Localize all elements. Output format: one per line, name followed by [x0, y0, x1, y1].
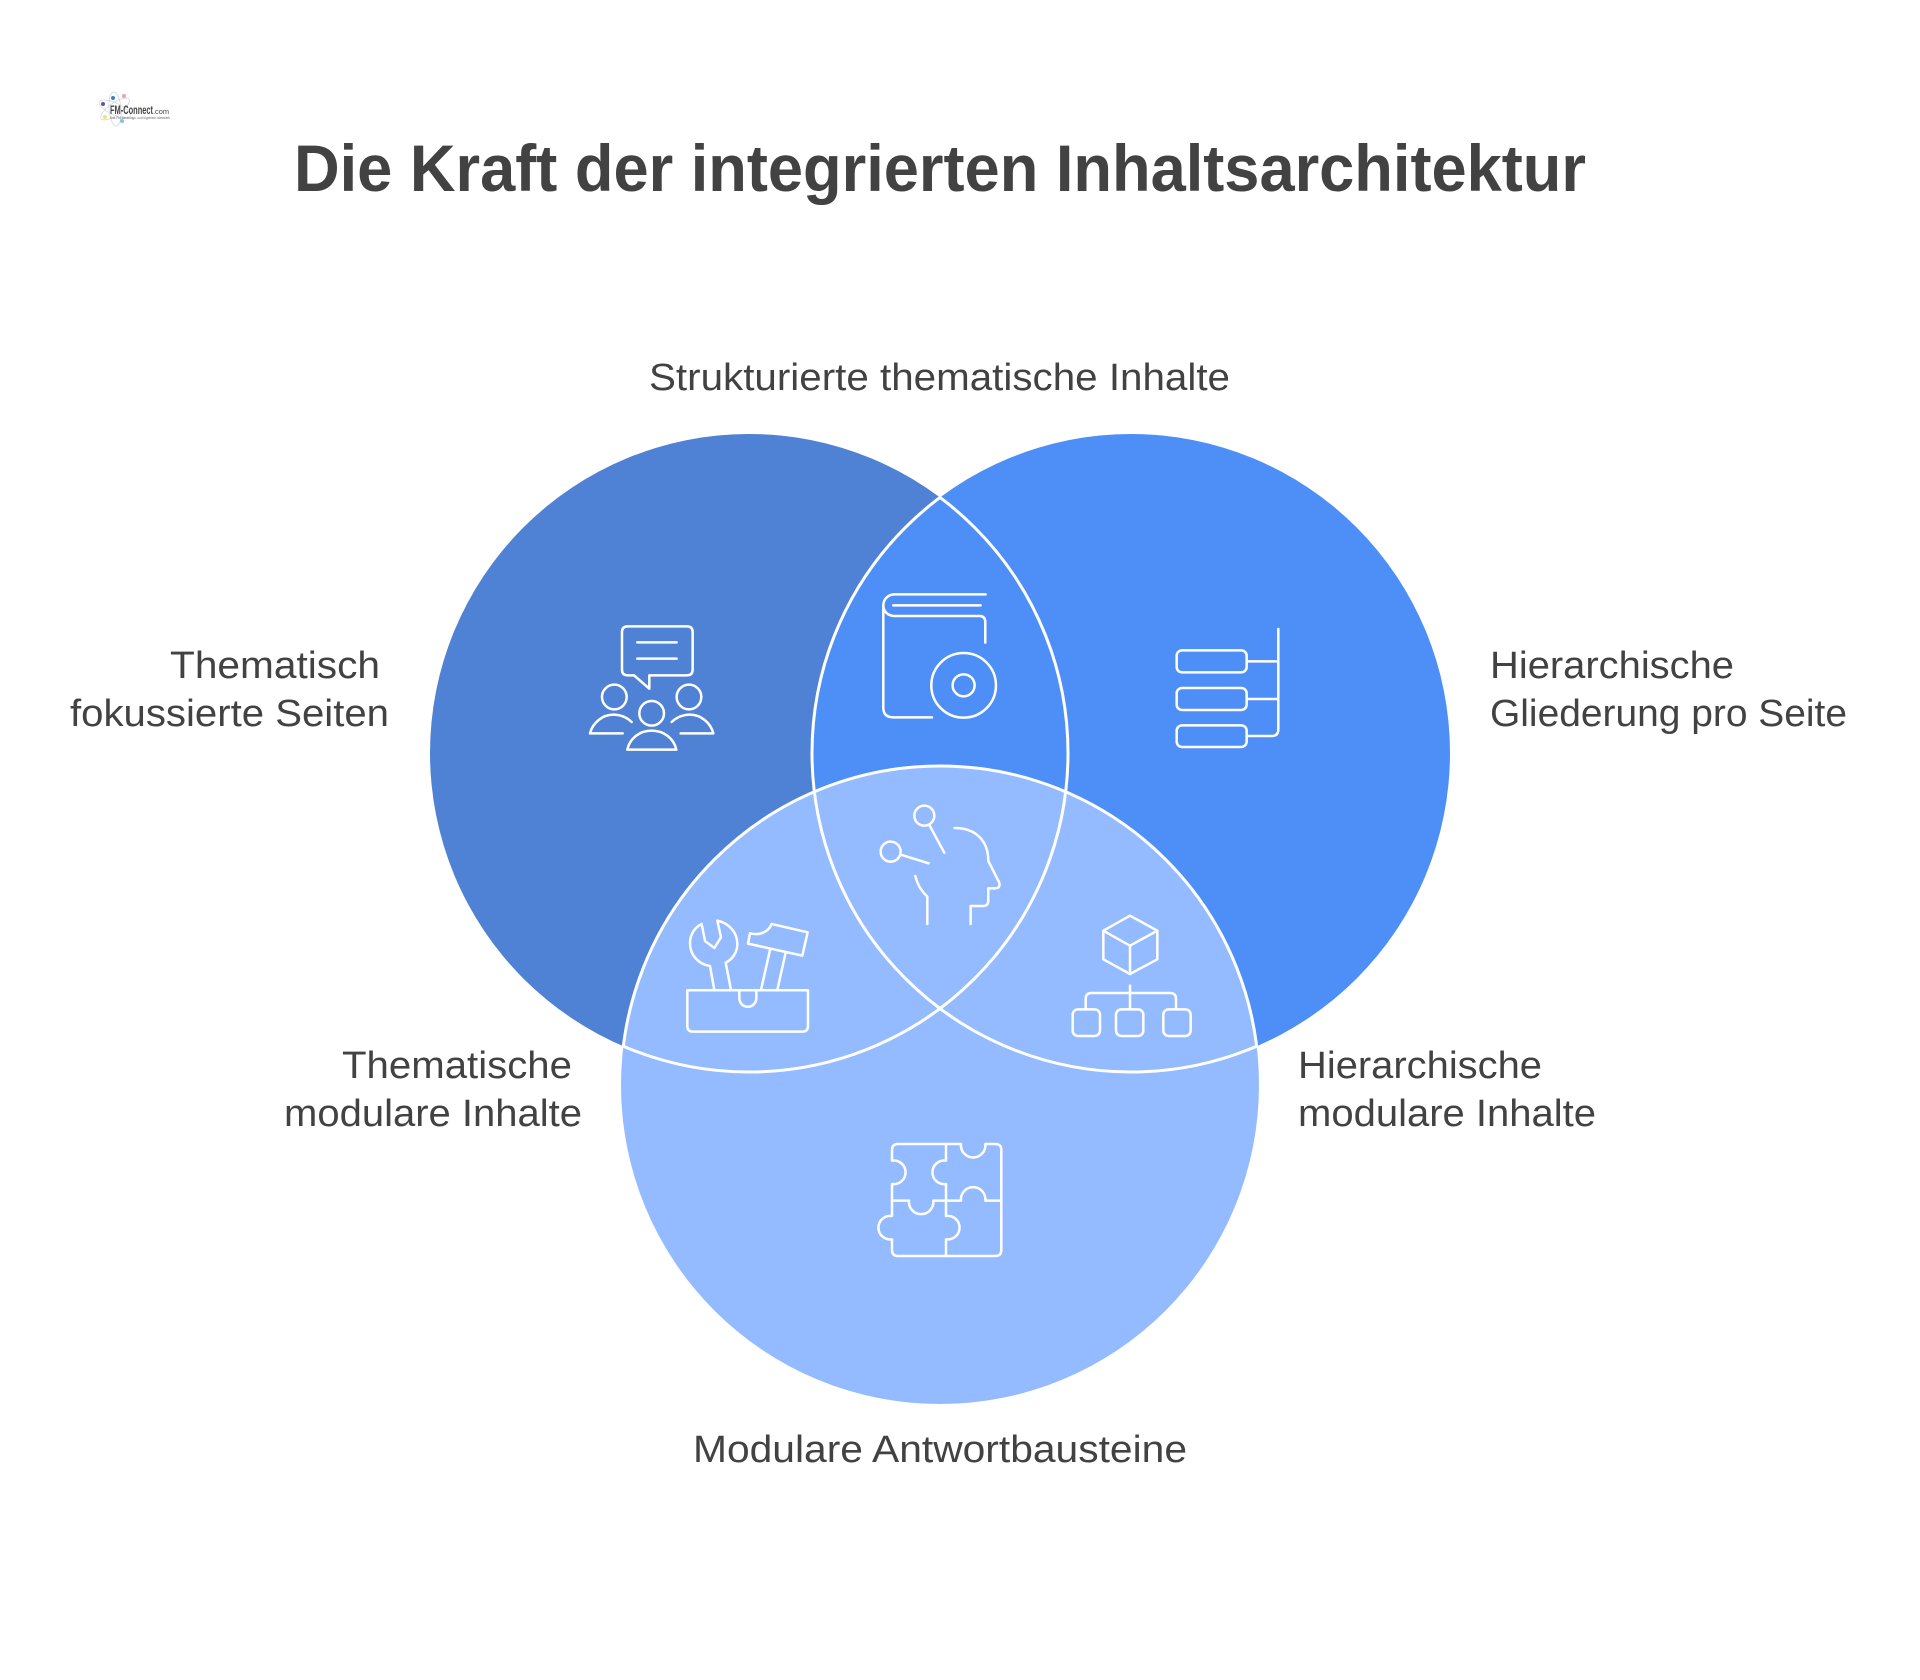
venn diagram	[430, 434, 1450, 1404]
icon: people with speech bubble	[590, 626, 713, 750]
label: Thematische modulare Inhalte	[284, 1045, 582, 1135]
logo: FM-Connect: FM-Connect	[110, 103, 153, 117]
label: Hierarchische Gliederung pro Seite	[1490, 645, 1847, 735]
label: Thematische modulare Inhalte: Thematische	[342, 1045, 572, 1087]
logo: FM-Connect	[97, 92, 170, 126]
label: Modulare Antwortbausteine: Modulare Antwortbausteine	[693, 1429, 1187, 1471]
title: Die Kraft der integrierten Inhaltsarchitektur	[294, 131, 1586, 205]
label: Hierarchische Gliederung pro Seite: Gliederung pro Seite	[1490, 693, 1847, 735]
icon: hierarchy list	[1177, 629, 1278, 747]
logo: FM-Connect: .com	[153, 109, 169, 116]
icon: cube hierarchy	[1073, 916, 1191, 1036]
label: Hierarchische modulare Inhalte	[1298, 1045, 1596, 1135]
circle: thematisch fokussierte Seiten	[430, 434, 1068, 1072]
label: Thematische modulare Inhalte: modulare Inhalte	[284, 1093, 582, 1135]
label: Hierarchische Gliederung pro Seite: Hierarchische	[1490, 645, 1734, 687]
label: Strukturierte thematische Inhalte: Strukturierte thematische Inhalte	[649, 357, 1230, 399]
icon: toolbox	[687, 921, 808, 1032]
icon: head with pins	[881, 806, 1000, 924]
label: Hierarchische modulare Inhalte: modulare Inhalte	[1298, 1093, 1596, 1135]
icon: puzzle	[878, 1144, 1001, 1256]
label: Hierarchische modulare Inhalte: Hierarchische	[1298, 1045, 1542, 1087]
label: Thematisch fokussierte Seiten: fokussierte Seiten	[70, 693, 389, 735]
logo: FM-Connect: Das FM-Beratungs- und Ingenieur-Netzwerk	[110, 116, 170, 120]
circle: modulare Antwortbausteine	[621, 766, 1259, 1404]
icon: book with disc	[883, 594, 996, 718]
circle: hierarchische Gliederung	[812, 434, 1450, 1072]
label: Thematisch fokussierte Seiten: Thematisch	[170, 645, 380, 687]
label: Thematisch fokussierte Seiten	[70, 645, 389, 735]
